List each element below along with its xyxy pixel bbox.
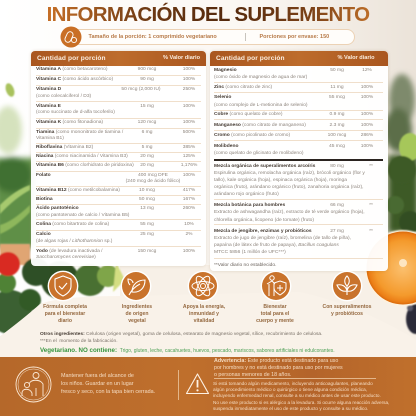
row: ginger blend: Mezcla de jengibre, enzimas y probióticos xyxy=(214,229,312,234)
row: manganeso xyxy=(214,120,383,131)
row: colina: 55 mg xyxy=(140,222,154,227)
row: selenio: 100% xyxy=(361,95,373,100)
row: vitamina B12: Vitamina B12 (como metilcobalamina) xyxy=(36,188,120,193)
row: vitamina A: 900 mcg xyxy=(138,67,156,72)
row: vitamina C xyxy=(36,76,201,86)
row: vitamina B12 xyxy=(36,187,201,196)
row: ginger blend: Extracto de jugo de jengibre (raíz), bromelina (de tallo de piña), xyxy=(214,236,351,241)
row: vitamina D xyxy=(36,86,201,102)
row: folato: (240 mcg de ácido fólico) xyxy=(126,179,180,184)
row: calcio: Calcio xyxy=(36,232,51,237)
row: molibdeno xyxy=(214,141,383,161)
row: cobre xyxy=(214,111,383,120)
panel: vitamins table xyxy=(31,51,206,266)
broccoli xyxy=(41,261,79,299)
row: ginger blend: 27 mg xyxy=(330,229,344,234)
row: vitamina K: Vitamina K (como fitonadiona) xyxy=(36,120,103,125)
icon: adult and child xyxy=(16,366,52,402)
table header: Cantidad por porción xyxy=(37,55,106,62)
icon: capsule xyxy=(60,26,82,48)
feature label: bienestar: Bienestar xyxy=(263,304,287,310)
feature label: superalimentos: y probióticos xyxy=(331,311,363,317)
row: vitamina D: Vitamina D xyxy=(36,87,61,92)
row: vitamina E: 15 mg xyxy=(140,104,154,109)
warning text: o personas menores de 18 años. xyxy=(214,372,291,378)
row: cromo: 286% xyxy=(361,133,373,138)
row: selenio xyxy=(214,93,383,111)
row: vitamina A xyxy=(36,66,201,76)
row: yodo: Yodo (de levadura inactivada / xyxy=(36,249,103,254)
row: vitamina B6: 20 mg xyxy=(140,163,154,168)
storage text: fresco y seco, con la tapa bien cerrada. xyxy=(61,389,155,395)
warning text: por hombres y no está destinado para uso por mujeres xyxy=(214,365,343,371)
row: riboflavina xyxy=(36,144,201,153)
medical caution text: suspenda inmediatamente el uso de este producto y consulte a su médico. xyxy=(213,406,368,411)
row: zinc: Zinc (como citrato de zinc) xyxy=(214,85,272,90)
row: folato: 400 mcg DFE xyxy=(138,173,168,178)
feature label: fórmula completa: para el bienestar xyxy=(45,311,85,317)
other ingredients: Otros ingredientes: Celulosa (origen vegetal), goma de celulosa, estearato de magnesio vegetal, sílice, recubrimiento de celulosa. xyxy=(40,332,322,337)
row: biotina: 167% xyxy=(183,197,195,202)
row: ginger blend: MTCC 5856 (1 millón de UFC***) xyxy=(214,250,286,255)
row: yodo: 150 mcg xyxy=(138,249,156,254)
feature label: energía: vitalidad xyxy=(194,318,214,324)
cream curve xyxy=(0,292,416,370)
feature label: ingredientes: Ingredientes xyxy=(122,304,152,310)
row: vitamina E: (como succinato de d-alfa tocoferilo) xyxy=(36,110,115,115)
icon: shield xyxy=(48,270,78,302)
row: folato xyxy=(36,172,201,187)
row: vitamina B12: 10 mcg xyxy=(139,188,155,193)
row: vitamina K: 100% xyxy=(183,120,195,125)
feature label: energía xyxy=(183,304,225,324)
row: ácido pantoténico xyxy=(36,205,201,220)
row: superfood blend xyxy=(214,161,383,200)
row: vitamina E: 100% xyxy=(183,104,195,109)
row: vitamina E: Vitamina E xyxy=(36,104,61,109)
row: superfood blend: tallo), kale orgánica (hoja), espinaca orgánica (hoja), moringa xyxy=(214,178,347,183)
panel: minerals and blends table xyxy=(210,51,388,271)
panel: warning banner xyxy=(0,357,416,416)
row: cobre: Cobre (como quelato de cobre) xyxy=(214,112,283,117)
row: riboflavina: Riboflavina (Vitamina B2) xyxy=(36,145,93,150)
medical caution text: No use este producto si es alérgico a la levadura. Si ocurre alguna reacción adversa, xyxy=(213,400,389,405)
row: vitamina D: 250% xyxy=(183,87,195,92)
row: calcio: (de algas rojas / Lithothamnion sp.) xyxy=(36,239,112,244)
title: INFORMACIÓN DEL SUPLEMENTO xyxy=(47,3,369,26)
row: magnesio: 12% xyxy=(362,68,372,73)
row: yodo xyxy=(36,248,195,260)
warning text xyxy=(214,358,343,378)
row: botanical blend: chlorella orgánica, licopeno (de tomate) (fruto) xyxy=(214,218,314,223)
row: cromo xyxy=(214,131,383,141)
feature label: ingredientes xyxy=(122,304,152,324)
serving info pill xyxy=(62,29,355,45)
row: tiamina: 500% xyxy=(183,130,195,135)
allergen statement: Vegetariano. NO contiene: Trigo, gluten, leche, cacahuetes, huevos, pescado, mariscos, sabores artificiales ni edulcorantes. xyxy=(40,347,335,354)
row: manganeso: Manganeso (como citrato de manganeso) xyxy=(214,123,306,128)
row: molibdeno: 45 mcg xyxy=(329,144,345,149)
row: vitamina A: 100% xyxy=(183,67,195,72)
row: vitamina D: 50 mcg (2,000 IU) xyxy=(121,87,161,92)
row: niacina xyxy=(36,153,201,162)
row: ginger blend: ** xyxy=(369,229,373,234)
row: manganeso: 2.3 mg xyxy=(330,123,344,128)
row: calcio: 2% xyxy=(185,232,193,237)
row: cromo: 100 mcg xyxy=(328,133,346,138)
row: cobre: 100% xyxy=(361,112,373,117)
servings per container: Porciones por envase: 150 xyxy=(260,34,329,40)
row: vitamina B6: Vitamina B6 (como clorhidrato de piridoxina) xyxy=(36,163,134,168)
row: superfood blend: 80 mg xyxy=(330,164,344,169)
row: magnesio xyxy=(214,66,383,83)
row: ácido pantoténico: (como pantotenato de calcio / Vitamina B5) xyxy=(36,213,129,218)
feature label: fórmula completa: diario xyxy=(58,318,72,324)
row: vitamina A: Vitamina A (como betacaroteno) xyxy=(36,67,108,72)
icon: leaf xyxy=(120,270,152,302)
row: magnesio: (como óxido de magnesio de agua de mar) xyxy=(214,75,307,80)
row: ácido pantoténico: Ácido pantoténico xyxy=(36,206,79,211)
row: vitamina K xyxy=(36,119,201,129)
row: selenio: (como complejo de L-metionina de selenio) xyxy=(214,103,308,108)
row: zinc xyxy=(214,83,383,93)
row: ginger blend: papaína (de látex de fruto de papaya), Bacillus coagulans xyxy=(214,243,339,248)
row: ácido pantoténico: 260% xyxy=(183,206,195,211)
light leaf xyxy=(399,133,416,161)
row: riboflavina: 5 mg xyxy=(142,145,152,150)
feature label: fórmula completa xyxy=(43,304,87,324)
row: molibdeno: (como quelato de glicinato de molibdeno) xyxy=(214,151,303,156)
feature label: energía: Apoya la energía, xyxy=(183,304,225,310)
row: biotina: Biotina xyxy=(36,197,53,202)
feature label: superalimentos xyxy=(322,304,372,317)
small leaf xyxy=(4,82,16,98)
storage text: Mantener fuera del alcance de xyxy=(61,373,134,379)
row: botanical blend: 66 mg xyxy=(330,203,344,208)
row: zinc: 11 mg xyxy=(330,85,344,90)
row: zinc: 100% xyxy=(361,85,373,90)
row: calcio xyxy=(36,231,201,247)
row: botanical blend: Extracto de ashwagandha (raíz), extracto de té verde orgánico (hoja), xyxy=(214,210,365,215)
bowl xyxy=(0,244,30,265)
row: magnesio: 50 mg xyxy=(330,68,344,73)
table header: Cantidad por porción xyxy=(216,55,285,62)
row: magnesio: Magnesio xyxy=(214,68,237,73)
tomato xyxy=(0,252,20,276)
row: vitamina C: 90 mg xyxy=(140,77,154,82)
medical caution text: algún procedimiento médico o quirúrgico o tiene alguna condición médica, xyxy=(213,387,367,392)
row: manganeso: 100% xyxy=(361,123,373,128)
row: molibdeno: 100% xyxy=(361,144,373,149)
medical caution text xyxy=(213,381,389,411)
table header xyxy=(31,51,206,66)
storage text xyxy=(61,373,155,395)
icon: person with shield xyxy=(260,271,292,302)
icon: sprout xyxy=(332,271,362,302)
feature label: bienestar xyxy=(256,304,294,324)
icon: warning triangle xyxy=(186,373,209,394)
row: colina: Colina (como bitartrato de colina) xyxy=(36,222,109,227)
medical caution text: incluyendo enfermedad renal, consulte a su médico antes de usar este producto. xyxy=(213,393,381,398)
table header: % Valor diario xyxy=(163,55,200,61)
serving size: Tamaño de la porción: 1 comprimido vegetariano xyxy=(88,34,217,40)
row: yodo: 100% xyxy=(183,249,195,254)
footnote: **Valor diario no establecido. xyxy=(214,263,276,268)
row: ácido pantoténico: 13 mg xyxy=(140,206,154,211)
row: colina: 10% xyxy=(184,222,194,227)
row: vitamina C: Vitamina C (como ácido ascórbico) xyxy=(36,77,113,82)
row: vitamina D: (como colecalciferol / D3) xyxy=(36,94,91,99)
row: biotina: 50 mcg xyxy=(139,197,155,202)
row: superfood blend: Espirulina orgánica, remolacha orgánica (raíz), brócoli orgánico (flor y xyxy=(214,171,365,176)
manufacture note: ***En el momento de la fabricación. xyxy=(40,339,118,344)
row: yodo: Saccharomyces cerevisiae) xyxy=(36,255,96,260)
storage text: los niños. Guardar en un lugar xyxy=(61,381,134,387)
row: vitamina B6 xyxy=(36,162,201,172)
row: superfood blend: Mezcla orgánica de superalimentos arcoíris xyxy=(214,164,315,169)
feature label: ingredientes: vegetal xyxy=(128,318,146,324)
row: vitamina K: 120 mcg xyxy=(138,120,156,125)
row: vitamina B6: 1,176% xyxy=(181,163,197,168)
row: superfood blend: ** xyxy=(369,164,373,169)
row: colina xyxy=(36,220,201,231)
row: tiamina: Tiamina (como mononitrato de tiamina / xyxy=(36,130,123,135)
feature label: superalimentos: Con superalimentos xyxy=(323,304,371,310)
feature label: bienestar: cuerpo y mente xyxy=(256,318,294,324)
orange xyxy=(365,230,416,306)
icon: atom xyxy=(188,270,218,302)
row: vitamina C: 100% xyxy=(183,77,195,82)
medical caution text: Si está tomando algún medicamento, incluyendo anticoagulantes, planeando xyxy=(213,381,373,386)
row: ginger blend xyxy=(214,225,383,259)
row: selenio: 55 mcg xyxy=(329,95,345,100)
row: molibdeno: Molibdeno xyxy=(214,144,238,149)
row: vitamina B12: 417% xyxy=(183,188,195,193)
row: tiamina: 6 mg xyxy=(142,130,152,135)
row: biotina xyxy=(36,196,201,205)
row: niacina: Niacina (como niacinamida / Vitamina B3) xyxy=(36,154,128,159)
table header xyxy=(210,51,388,66)
row: botanical blend: Mezcla botánica para hombres xyxy=(214,203,285,208)
berries xyxy=(406,304,416,334)
row: selenio: Selenio xyxy=(214,95,231,100)
warning text: Advertencia: Este producto está destinado para uso xyxy=(214,358,338,364)
row: botanical blend xyxy=(214,200,383,225)
row: niacina: 125% xyxy=(183,154,195,159)
row: botanical blend: ** xyxy=(369,203,373,208)
row: tiamina xyxy=(36,129,201,144)
row: cromo: Cromo (como picolinato de cromo) xyxy=(214,133,290,138)
table header: % Valor diario xyxy=(338,55,374,61)
row: tiamina: Vitamina B1) xyxy=(36,136,64,141)
row: vitamina E xyxy=(36,102,201,119)
row: superfood blend: orgánica (fruto), arándano orgánico (fruto), zanahoria orgánica (raíz), xyxy=(214,185,364,190)
feature label: bienestar: total para el xyxy=(261,311,289,317)
row: folato: Folato xyxy=(36,173,51,178)
row: niacina: 20 mg xyxy=(140,154,154,159)
feature label: fórmula completa: Fórmula completa xyxy=(43,304,87,310)
row: cobre: 0.9 mg xyxy=(330,112,344,117)
row: folato: 100% xyxy=(183,173,195,178)
row: superfood blend: arándano rojo orgánico (fruto) xyxy=(214,192,279,197)
row: calcio: 25 mg xyxy=(140,232,154,237)
feature label: ingredientes: de origen xyxy=(126,311,148,317)
row: riboflavina: 385% xyxy=(183,145,195,150)
feature label: energía: inmunidad y xyxy=(189,311,219,317)
